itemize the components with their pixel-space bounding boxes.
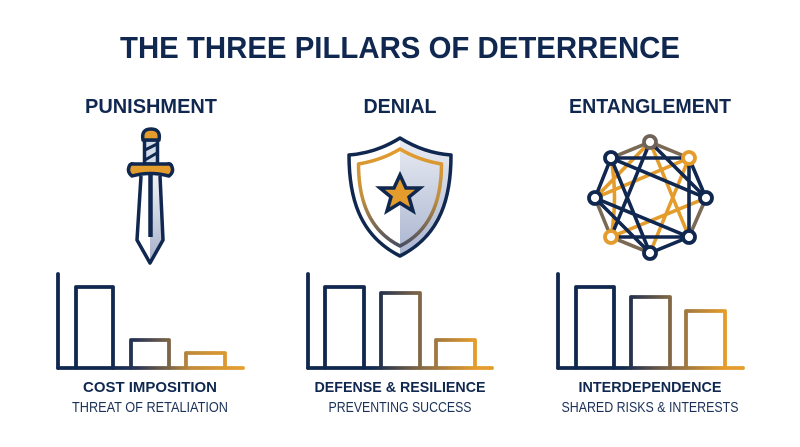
label: threat of retaliation: THREAT OF RETALIATION — [72, 400, 228, 416]
heading: punishment: PUNISHMENT — [85, 96, 217, 118]
label: cost imposition: COST IMPOSITION — [83, 379, 217, 396]
panel: denial — [308, 96, 492, 416]
bar chart: entanglement — [558, 274, 743, 368]
label: interdependence: INTERDEPENDENCE — [578, 379, 722, 396]
bar chart: denial — [308, 274, 492, 368]
panel: entanglement — [558, 96, 743, 416]
panel: punishment — [58, 96, 243, 416]
label: defense and resilience: DEFENSE & RESILIENCE — [314, 379, 486, 396]
heading: entanglement: ENTANGLEMENT — [569, 96, 731, 118]
bar chart: punishment — [58, 274, 243, 368]
heading: denial: DENIAL — [364, 96, 436, 118]
icon: network — [589, 136, 712, 259]
label: shared risks and interests: SHARED RISKS & INTERESTS — [562, 400, 738, 416]
label: preventing success: PREVENTING SUCCESS — [328, 400, 472, 416]
title: THE THREE PILLARS OF DETERRENCE — [120, 30, 680, 65]
icon: shield — [349, 138, 451, 256]
icon: sword — [128, 129, 173, 263]
